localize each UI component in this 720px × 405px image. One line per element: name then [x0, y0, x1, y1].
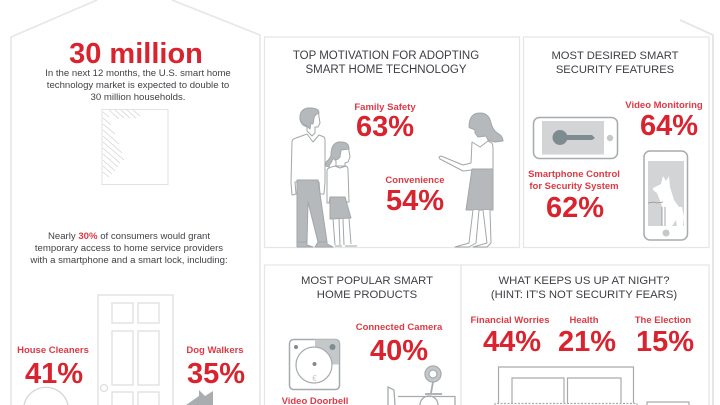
stat: house cleaners: 41%	[25, 358, 83, 390]
stat: house cleaners: House Cleaners	[17, 345, 89, 356]
stat: convenience: Convenience	[385, 175, 445, 186]
icon: father	[291, 108, 333, 247]
stat: health: 21%	[558, 326, 616, 358]
stat: connected camera	[356, 322, 443, 367]
stat: convenience: 54%	[386, 185, 444, 217]
heading: (HINT: IT'S NOT SECURITY FEARS)	[491, 289, 677, 301]
stat: family safety: 63%	[356, 111, 414, 143]
icon: door	[98, 295, 173, 405]
heading: WHAT KEEPS US UP AT NIGHT?	[499, 275, 669, 287]
market description: 30 million households.	[91, 92, 185, 103]
stat: health: Health	[569, 315, 599, 326]
heading: MOST POPULAR SMART	[301, 275, 433, 287]
stat: the election: 15%	[636, 326, 694, 358]
icon: bed	[495, 367, 689, 405]
icon: hatched building square	[102, 110, 168, 184]
heading: MOST DESIRED SMART	[551, 50, 679, 62]
access description: with a smartphone and a smart lock, including:	[29, 255, 228, 266]
panel: what keeps us up	[461, 265, 709, 405]
headline: 30 million: 30 million	[69, 38, 203, 70]
stat: dog walkers: Dog Walkers	[186, 345, 244, 356]
stat: video monitoring: 64%	[640, 110, 698, 142]
stat: connected camera: Connected Camera	[356, 322, 443, 333]
heading: TOP MOTIVATION FOR ADOPTING	[293, 50, 479, 62]
stat: smartphone control	[528, 169, 620, 224]
icon: connected camera on shelf	[388, 366, 455, 405]
heading: HOME PRODUCTS	[317, 289, 418, 301]
heading: SECURITY FEATURES	[556, 64, 674, 76]
stat: smartphone control: for Security System	[529, 181, 619, 192]
icon: cleaner head	[24, 387, 68, 405]
stat: smartphone control: 62%	[546, 192, 604, 224]
stat: smartphone control: Smartphone Control	[528, 169, 620, 180]
stat: financial worries	[470, 315, 550, 358]
panel: top motivation	[264, 37, 520, 248]
panel: temporary access	[17, 231, 245, 405]
stat: family safety: Family Safety	[354, 102, 416, 113]
access description: Nearly 30% of consumers would grant	[48, 231, 210, 242]
stat: dog walkers: 35%	[187, 358, 245, 390]
icon: phone with dog	[644, 151, 688, 240]
icon: daughter	[326, 142, 357, 246]
panel: security features	[524, 37, 709, 248]
access description: temporary access to home service providers	[35, 243, 223, 254]
panel: popular products	[264, 265, 461, 405]
icon: mother	[439, 113, 503, 247]
stat: video monitoring: Video Monitoring	[625, 100, 703, 111]
icon: dog	[186, 390, 213, 405]
heading: SMART HOME TECHNOLOGY	[305, 64, 467, 76]
market description: In the next 12 months, the U.S. smart home	[45, 68, 231, 79]
icon: video doorbell	[290, 340, 340, 390]
stat: the election: The Election	[635, 315, 691, 326]
market description: technology market is expected to double to	[47, 80, 229, 91]
icon: video doorbell: €	[312, 374, 317, 383]
stat: dog walkers	[186, 345, 245, 405]
panel: smart home market	[45, 38, 231, 184]
stat: connected camera: 40%	[370, 335, 428, 367]
stat: house cleaners	[17, 345, 89, 405]
icon: phone with key	[534, 118, 618, 158]
stat: video monitoring	[625, 100, 703, 142]
stat: financial worries: Financial Worries	[470, 315, 550, 326]
stat: financial worries: 44%	[483, 326, 541, 358]
